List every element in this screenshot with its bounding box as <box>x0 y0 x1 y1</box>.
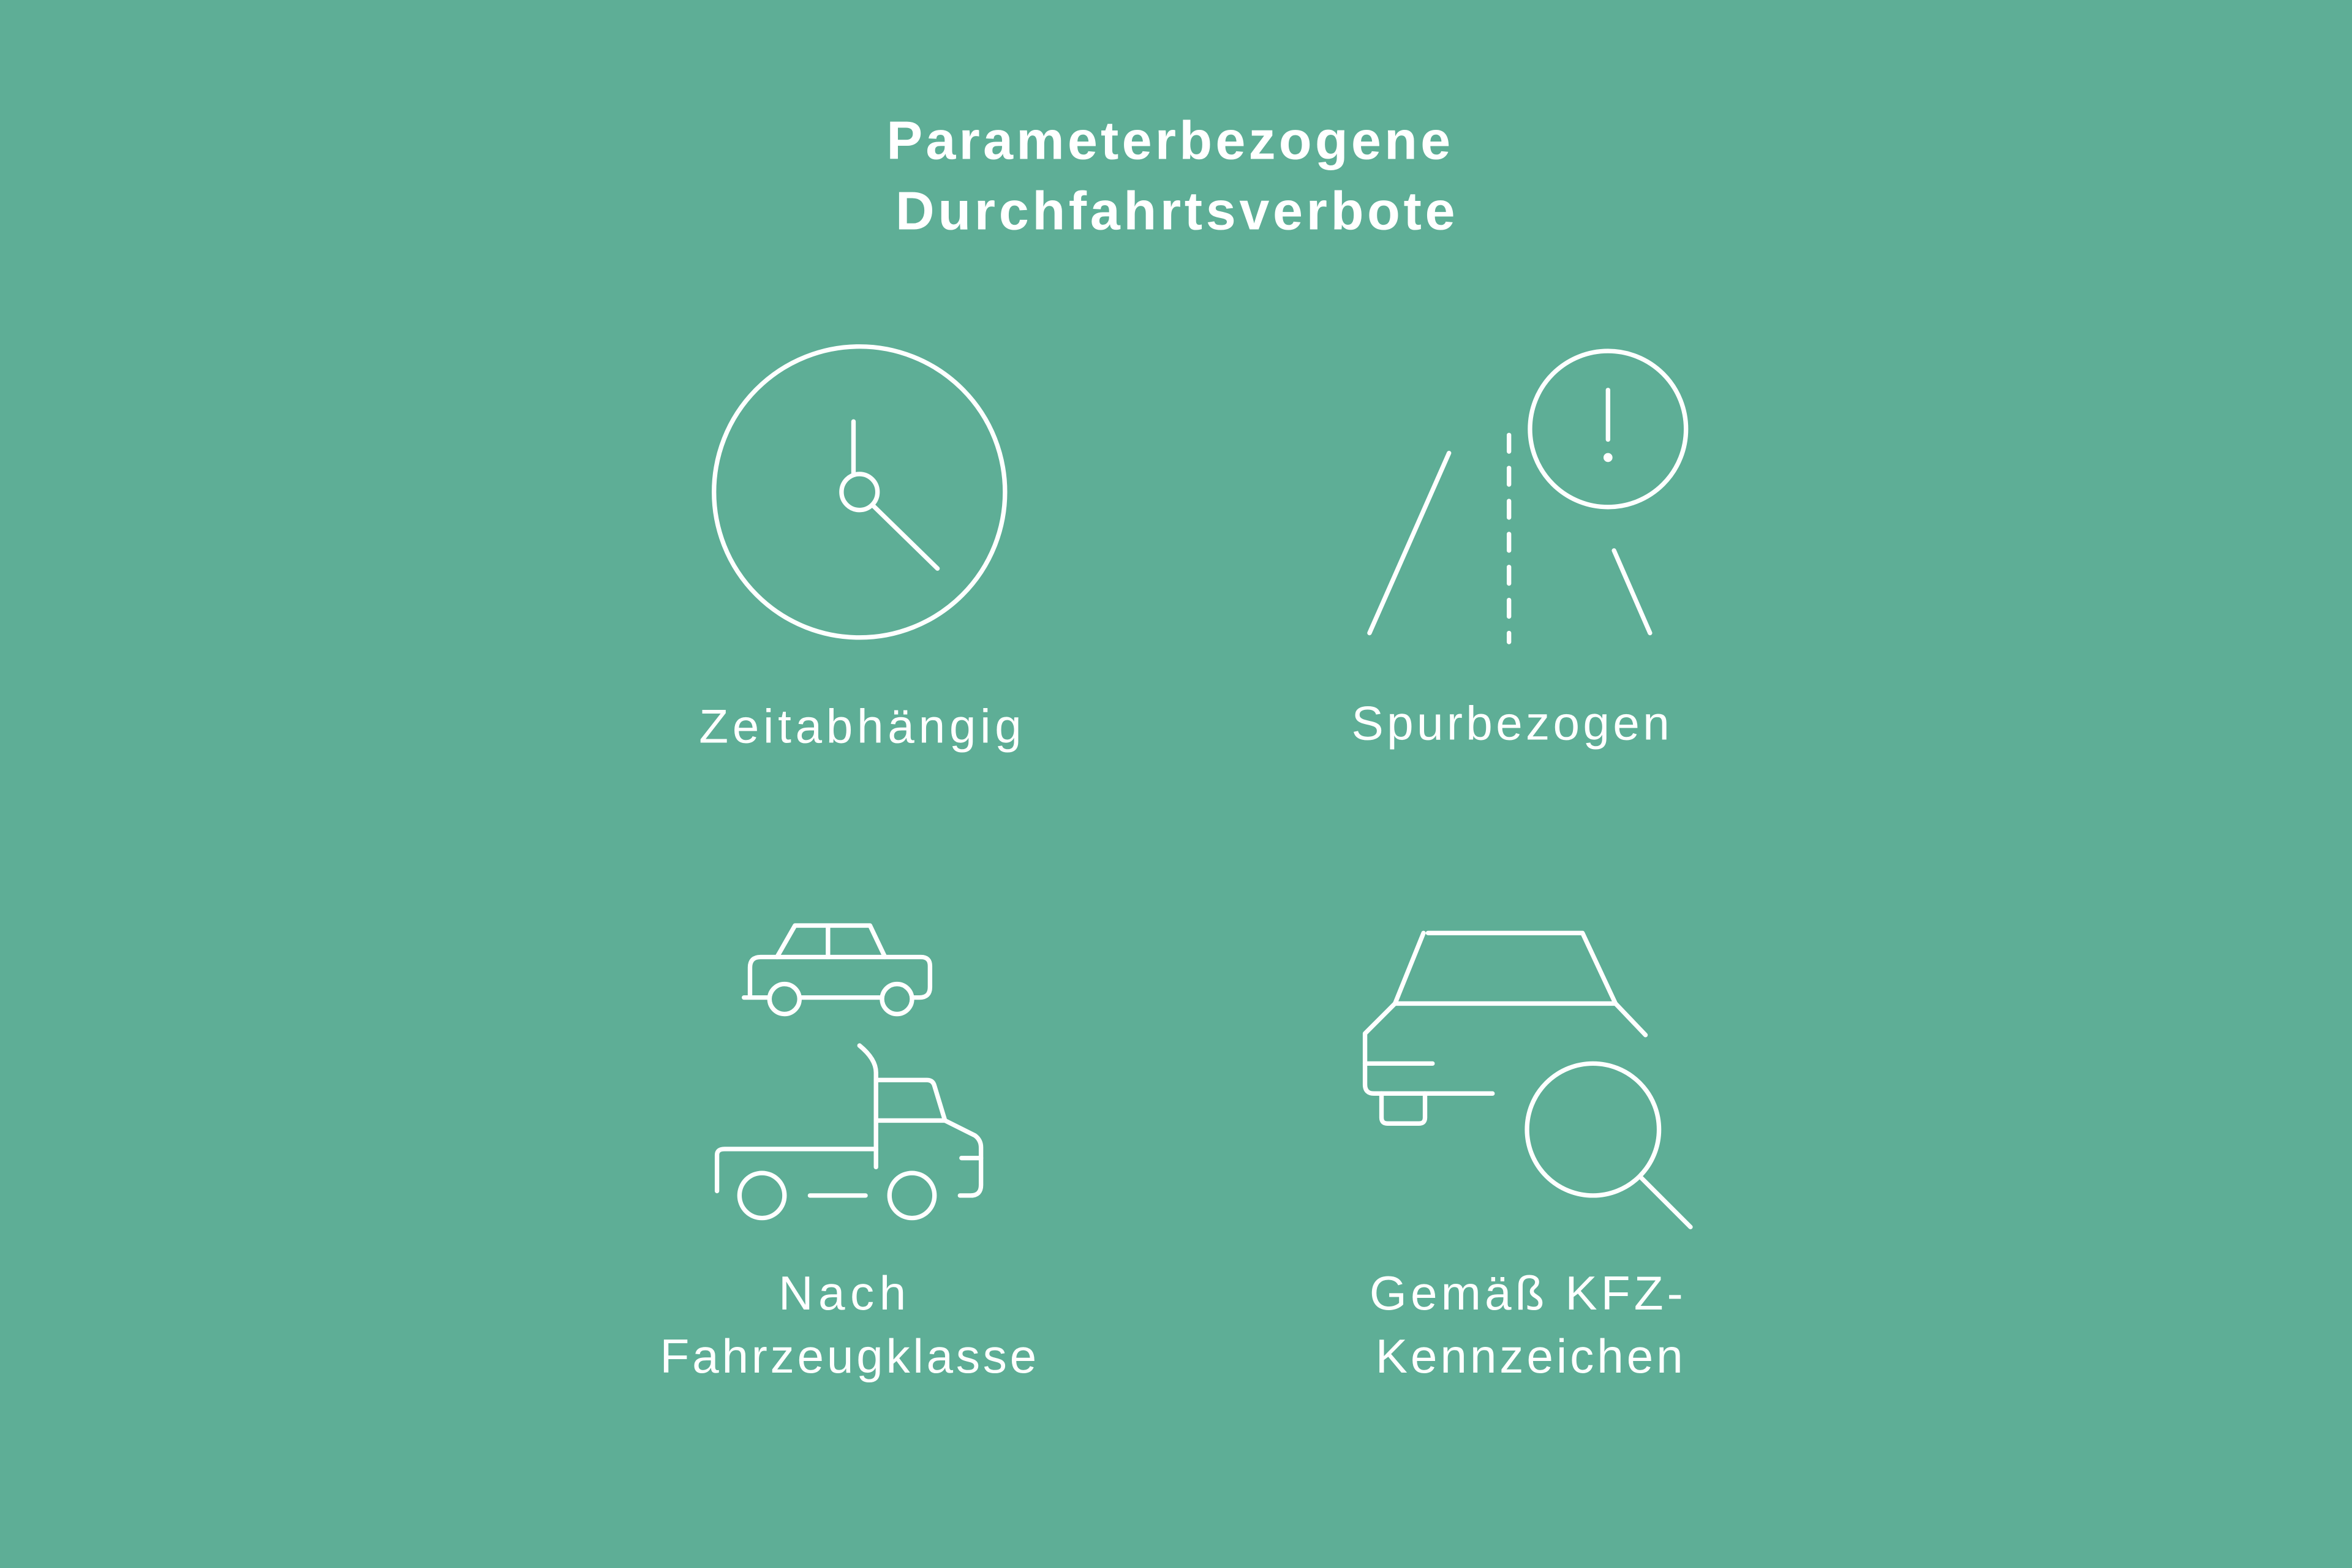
label: Nach Fahrzeugklasse: Nach <box>778 1266 906 1320</box>
label: Gemäß KFZ-Kennzeichen <box>1370 1266 1683 1383</box>
title: Parameterbezogene <box>886 110 1450 171</box>
label: Zeitabhängig: Zeitabhängig <box>699 699 1022 753</box>
label: Nach Fahrzeugklasse <box>660 1266 1036 1383</box>
icon: car and truck <box>717 925 981 1218</box>
label: Gemäß KFZ-Kennzeichen: Kennzeichen <box>1376 1329 1683 1383</box>
label: Gemäß KFZ-Kennzeichen: Gemäß KFZ- <box>1370 1266 1683 1320</box>
label: Nach Fahrzeugklasse: Fahrzeugklasse <box>660 1329 1036 1383</box>
label: Spurbezogen: Spurbezogen <box>1352 696 1670 750</box>
title: Durchfahrtsverbote <box>895 181 1455 241</box>
icon: clock <box>714 347 1005 638</box>
icon: lanes with warning <box>1370 351 1686 642</box>
icon: car rear with magnifier <box>1365 933 1691 1227</box>
title <box>886 110 1455 241</box>
